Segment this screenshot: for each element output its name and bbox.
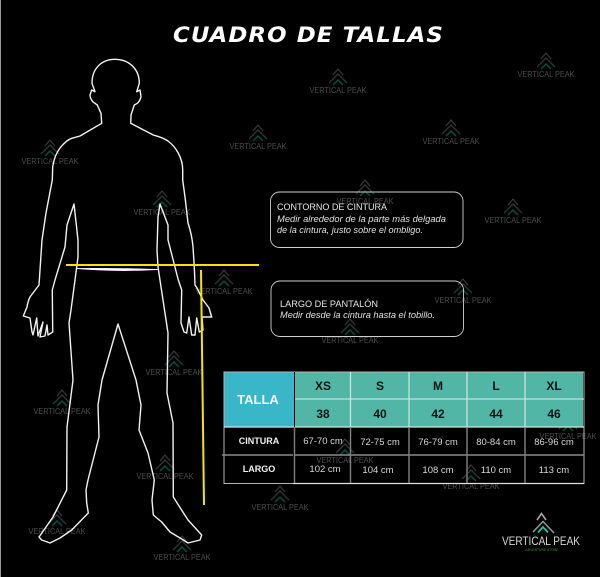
watermark: VERTICAL PEAK xyxy=(484,216,542,225)
row: largo: 113 cm xyxy=(539,465,569,476)
size table xyxy=(222,372,584,484)
watermark: VERTICAL PEAK xyxy=(154,553,211,562)
watermark xyxy=(146,351,203,377)
header: sizes: 46 xyxy=(547,407,561,421)
callout: largo de pantalon: LARGO DE PANTALÓN xyxy=(280,299,378,310)
header: sizes: S xyxy=(376,379,384,393)
row: cintura: 80-84 cm xyxy=(476,437,516,448)
header: talla xyxy=(224,372,294,427)
watermark xyxy=(34,390,91,416)
watermark: VERTICAL PEAK xyxy=(422,137,480,146)
watermark xyxy=(22,140,79,166)
watermark xyxy=(310,69,367,95)
callout: largo de pantalon: Medir desde la cintura hasta el tobillo. xyxy=(280,310,435,320)
logo: vertical peak: ADVENTURE STORE xyxy=(526,548,559,552)
callout: largo de pantalon xyxy=(271,281,464,336)
logo: vertical peak xyxy=(502,514,580,552)
row: largo: 102 cm xyxy=(309,464,341,475)
header: sizes: 38 xyxy=(316,407,330,421)
row: cintura xyxy=(239,436,574,448)
watermark: VERTICAL PEAK xyxy=(518,70,575,79)
row: largo xyxy=(243,464,569,476)
watermark: VERTICAL PEAK xyxy=(146,368,203,377)
header: sizes: XL xyxy=(546,379,562,393)
callout: contorno de cintura: CONTORNO DE CINTURA xyxy=(277,202,388,213)
watermark: VERTICAL PEAK xyxy=(28,527,86,536)
header: sizes: 40 xyxy=(373,407,387,421)
watermark xyxy=(322,319,379,345)
watermark xyxy=(336,180,394,206)
watermark xyxy=(540,415,597,441)
watermark xyxy=(252,486,309,512)
row: cintura: 76-79 cm xyxy=(418,437,458,448)
watermark xyxy=(434,279,492,305)
callout: contorno de cintura xyxy=(270,192,463,248)
watermark: VERTICAL PEAK xyxy=(134,208,191,217)
row: largo: 104 cm xyxy=(362,465,394,476)
callout: contorno de cintura: de la cintura, justo sobre el ombligo. xyxy=(277,225,423,235)
watermark xyxy=(196,270,253,296)
watermark xyxy=(422,120,480,146)
table grid xyxy=(222,372,584,484)
callout: contorno de cintura: Medir alrededor de la parte más delgada xyxy=(277,214,446,224)
watermark: VERTICAL PEAK xyxy=(22,157,79,166)
watermark: VERTICAL PEAK xyxy=(252,503,309,512)
row: cintura: 72-75 cm xyxy=(360,437,400,448)
header: sizes: M xyxy=(433,379,443,393)
watermark xyxy=(442,465,500,491)
row: cintura: 67-70 cm xyxy=(303,436,343,447)
row: largo: 108 cm xyxy=(422,465,454,476)
header: sizes xyxy=(295,372,583,427)
watermark xyxy=(136,455,194,481)
leg length measure line xyxy=(201,270,204,505)
row: largo: 110 cm xyxy=(481,465,511,476)
header: sizes: 42 xyxy=(431,407,445,421)
watermark: VERTICAL PEAK xyxy=(336,197,394,206)
watermark: VERTICAL PEAK xyxy=(322,336,379,345)
watermark xyxy=(28,510,86,536)
watermark: VERTICAL PEAK xyxy=(34,407,91,416)
watermark xyxy=(154,536,211,562)
title: CUADRO DE TALLAS xyxy=(173,23,444,47)
watermark: VERTICAL PEAK xyxy=(230,142,287,151)
header: sizes: 44 xyxy=(489,407,503,421)
watermark: VERTICAL PEAK xyxy=(136,472,194,481)
header: sizes: L xyxy=(492,379,500,393)
watermark xyxy=(518,53,575,79)
logo: vertical peak: VERTICAL PEAK xyxy=(502,536,580,548)
row: cintura: 86-96 cm xyxy=(534,437,574,448)
watermark: VERTICAL PEAK xyxy=(316,456,374,465)
waistband xyxy=(76,268,158,271)
human body outline xyxy=(23,59,212,543)
watermark xyxy=(230,125,287,151)
watermark xyxy=(134,191,191,217)
watermark xyxy=(316,439,374,465)
watermark: VERTICAL PEAK xyxy=(196,287,253,296)
watermark xyxy=(484,199,542,225)
header: sizes: XS xyxy=(315,379,331,393)
header: talla: TALLA xyxy=(237,392,279,407)
watermark: VERTICAL PEAK xyxy=(310,86,367,95)
waist measure line xyxy=(66,264,259,266)
row: cintura: CINTURA xyxy=(239,436,280,446)
row: largo: LARGO xyxy=(243,464,275,474)
watermark: VERTICAL PEAK xyxy=(540,432,597,441)
watermark: VERTICAL PEAK xyxy=(442,482,500,491)
watermark: VERTICAL PEAK xyxy=(434,296,492,305)
